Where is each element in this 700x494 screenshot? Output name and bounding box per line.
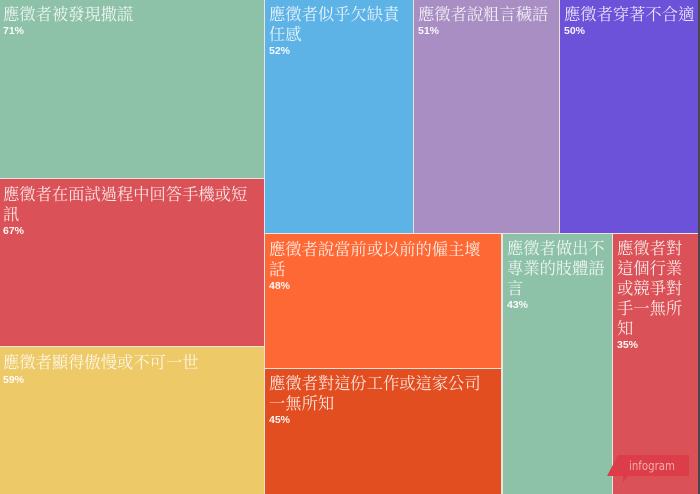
panel: no knowledge of job or company 45%: 45%: [269, 414, 290, 426]
panel: inappropriate dress 50%: 應徵者穿著不合適: [564, 5, 694, 24]
panel: profanity 51%: 應徵者說粗言穢語: [418, 5, 548, 24]
panel: phone use 67%: [0, 179, 264, 346]
panel: badmouthing employers 48%: 48%: [269, 280, 290, 292]
icon: infogram logo badge: infogram: [629, 459, 675, 473]
panel: no industry knowledge 35%: 手一無所: [617, 299, 682, 318]
panel: arrogance 59%: 59%: [3, 374, 24, 386]
panel: badmouthing employers 48%: 應徵者說當前或以前的僱主壞: [269, 240, 481, 259]
panel: no knowledge of job or company 45%: 一無所知: [269, 394, 334, 413]
panel: profanity 51%: [414, 0, 558, 233]
panel: no industry knowledge 35%: 知: [617, 319, 633, 338]
panel: inappropriate dress 50%: [560, 0, 698, 233]
panel: lying 71%: [0, 0, 264, 178]
panel: arrogance 59%: 應徵者顯得傲慢或不可一世: [3, 353, 198, 372]
panel: no knowledge of job or company 45%: [265, 369, 501, 494]
icon: infogram logo badge: [607, 455, 689, 482]
panel: no industry knowledge 35%: 應徵者對: [617, 239, 682, 258]
panel: lack of responsibility 52%: 52%: [269, 45, 290, 57]
panel: inappropriate dress 50%: 50%: [564, 25, 585, 37]
panel: lying 71%: 應徵者被發現撒謊: [3, 5, 133, 24]
panel: unprofessional body language 43%: 言: [507, 279, 523, 298]
panel: unprofessional body language 43%: [503, 234, 612, 494]
panel: unprofessional body language 43%: 43%: [507, 299, 528, 311]
panel: no industry knowledge 35%: [613, 234, 698, 494]
panel: lack of responsibility 52%: [265, 0, 413, 233]
panel: phone use 67%: 67%: [3, 225, 24, 237]
dark right edge: [698, 0, 700, 494]
panel: badmouthing employers 48%: [265, 234, 501, 368]
panel: profanity 51%: 51%: [418, 25, 439, 37]
panel: no industry knowledge 35%: 或競爭對: [617, 279, 682, 298]
panel: unprofessional body language 43%: 應徵者做出不: [507, 239, 605, 258]
panel: phone use 67%: 應徵者在面試過程中回答手機或短: [3, 185, 247, 204]
panel: no knowledge of job or company 45%: 應徵者對這份工作或這家公司: [269, 374, 481, 393]
panel: badmouthing employers 48%: 話: [269, 260, 285, 279]
panel: no industry knowledge 35%: 35%: [617, 339, 638, 351]
panel: lack of responsibility 52%: 應徵者似乎欠缺責: [269, 5, 399, 24]
panel: unprofessional body language 43%: 專業的肢體語: [507, 259, 605, 278]
panel: no industry knowledge 35%: 這個行業: [617, 259, 682, 278]
panel: lack of responsibility 52%: 任感: [269, 25, 302, 44]
panel: lying 71%: 71%: [3, 25, 24, 37]
panel: phone use 67%: 訊: [3, 205, 19, 224]
panel: arrogance 59%: [0, 347, 264, 494]
